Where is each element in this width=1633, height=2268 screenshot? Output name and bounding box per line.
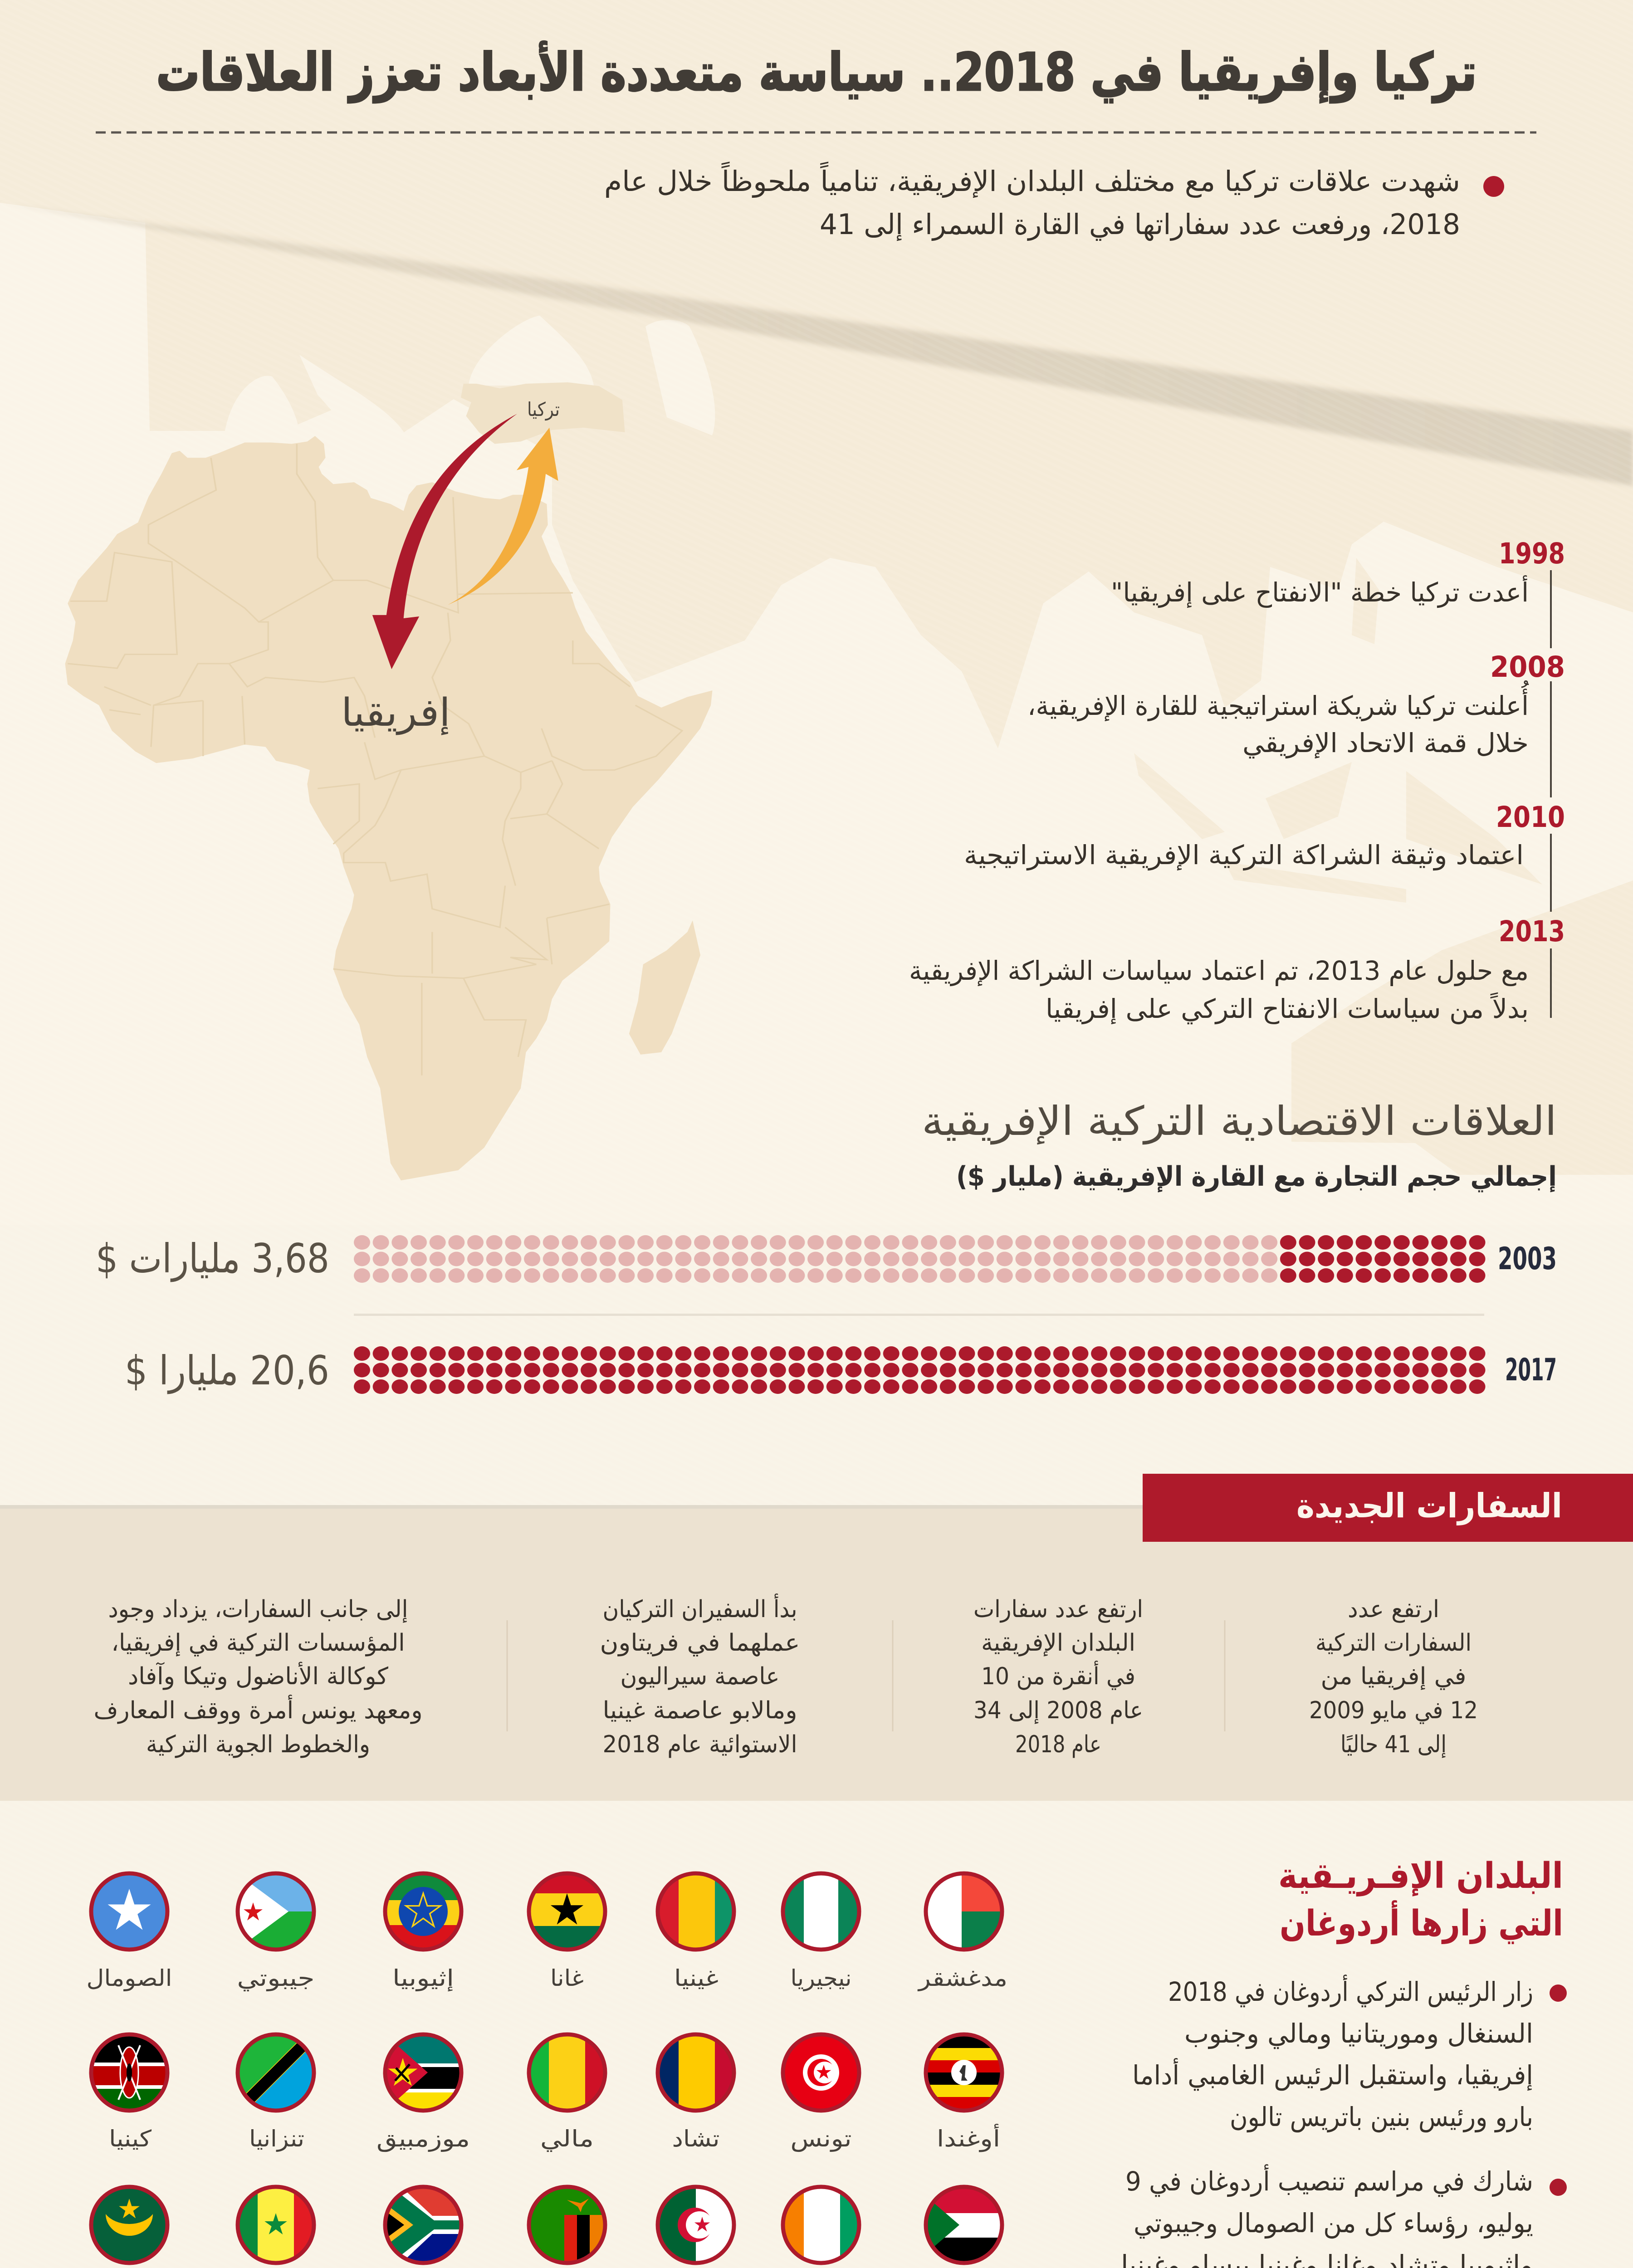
flag: Nigeria: [783, 1873, 859, 1950]
column 4: والخطوط الجوية التركية: [146, 1731, 370, 1758]
flag: Ghana: [529, 1873, 605, 1950]
intro text block: 2018، ورفعت عدد سفاراتها في القارة السمراء إلى 41: [820, 208, 1460, 241]
dots 2003: [354, 1234, 1488, 1284]
column 1: في إفريقيا من: [1321, 1663, 1466, 1690]
country labels: غينيا: [674, 1965, 719, 1991]
panel: flags grid: [91, 1873, 1002, 2263]
year 2010: 2010: [1496, 801, 1565, 834]
country labels: إثيوبيا: [392, 1965, 454, 1992]
column 2: عام 2008 إلى 34: [973, 1697, 1143, 1724]
country labels: تنزانيا: [249, 2126, 304, 2152]
country labels: كينيا: [109, 2126, 152, 2152]
dots 2017: [354, 1345, 1488, 1395]
flag: Uganda: [926, 2034, 1002, 2111]
flag: Ethiopia: [385, 1873, 461, 1950]
banner: [1143, 1474, 1633, 1542]
seas: [224, 316, 715, 435]
year 2013: 2013: [1499, 915, 1565, 948]
flag: Kenya: [91, 2034, 167, 2111]
country labels: الصومال: [86, 1965, 172, 1991]
text block: visits: إفريقيا، واستقبل الرئيس الغامبي أداما: [1132, 2058, 1533, 2091]
column 3: عاصمة سيراليون: [621, 1663, 779, 1690]
flag: Mozambique: [385, 2034, 461, 2111]
column 1: 12 في مايو 2009: [1309, 1697, 1478, 1724]
column 3: بدأ السفيران التركيان: [602, 1593, 797, 1623]
column 4: ومعهد يونس أمرة ووقف المعارف: [93, 1695, 423, 1724]
map: Africa and Turkey: [65, 382, 712, 1180]
country labels: [86, 1965, 1007, 2268]
label: Africa: إفريقيا: [341, 690, 450, 735]
flag: Mali: [529, 2034, 605, 2111]
intro text block: شهدت علاقات تركيا مع مختلف البلدان الإفريقية، تنامياً ملحوظاً خلال عام: [604, 161, 1460, 198]
heading: Erdogan's visited countries: البلدان الإفـريـقية: [1278, 1856, 1563, 1897]
heading: Erdogan's visited countries: [1278, 1856, 1563, 1944]
text block: visits: زار الرئيس التركي أردوغان في 2018: [1168, 1975, 1533, 2008]
year 2003: 2003: [1498, 1241, 1557, 1277]
event 2013: [909, 955, 1529, 1025]
country labels: تشاد: [672, 2126, 719, 2152]
intro text block: [604, 161, 1504, 241]
column 4: إلى جانب السفارات، يزداد وجود: [108, 1596, 408, 1623]
column 1: [1309, 1596, 1478, 1758]
event 2008: خلال قمة الاتحاد الإفريقي: [1242, 728, 1529, 759]
subheading: total trade: إجمالي حجم التجارة مع القارة الإفريقية (مليار $): [956, 1161, 1557, 1193]
flag: Mauritania: [91, 2187, 167, 2263]
banner: السفارات الجديدة: [1296, 1486, 1562, 1525]
column 1: السفارات التركية: [1315, 1629, 1472, 1657]
top paper background above fold: [0, 0, 1633, 431]
heading: Erdogan's visited countries: التي زارها أردوغان: [1280, 1900, 1563, 1944]
arrow: Turkey to Africa: [372, 414, 517, 669]
flag: South Africa: [385, 2187, 461, 2263]
year 2017: 2017: [1505, 1352, 1557, 1388]
dot chart 2003: [96, 1234, 1557, 1284]
text block: visits: بارو ورئيس بنين باتريس تالون: [1230, 2102, 1533, 2133]
column 2: عام 2018: [1015, 1731, 1101, 1758]
dot chart 2017: [125, 1345, 1557, 1395]
flag: Djibouti: [238, 1873, 314, 1950]
country labels: مالي: [540, 2126, 594, 2152]
column 1: ارتفع عدد: [1348, 1596, 1439, 1623]
country labels: مدغشقر: [917, 1965, 1007, 1991]
title: تركيا وإفريقيا في 2018.. سياسة متعددة الأبعاد تعزز العلاقات: [156, 41, 1477, 103]
flag: Algeria: [658, 2187, 734, 2263]
title divider: [96, 132, 1536, 133]
country labels: موزمبيق: [376, 2126, 470, 2152]
text block: inauguration: [1121, 2164, 1567, 2268]
text block: inauguration: شارك في مراسم تنصيب أردوغان في 9: [1125, 2164, 1533, 2197]
text block: inauguration: يوليو، رؤساء كل من الصومال وجيبوتي: [1134, 2208, 1533, 2239]
column 2: في أنقرة من 10: [981, 1661, 1135, 1690]
year 2008: 2008: [1490, 650, 1565, 684]
flag: Tunisia: [783, 2034, 859, 2111]
flag: Somalia: [91, 1873, 167, 1950]
Turkey shape: [461, 382, 625, 444]
flag: Chad: [658, 2034, 734, 2111]
event 2008: أُعلنت تركيا شريكة استراتيجية للقارة الإفريقية،: [1027, 680, 1529, 722]
column 3: عملهما في فريتاون: [600, 1629, 800, 1657]
value 2003: 3,68 مليارات $: [96, 1235, 329, 1282]
flag: Zambia: [529, 2187, 605, 2263]
text block: visits: السنغال وموريتانيا ومالي وجنوب: [1184, 2018, 1533, 2049]
Africa shape: [65, 436, 712, 1180]
event 1998: أعدت تركيا خطة "الانفتاح على إفريقيا": [1111, 575, 1529, 608]
panel: new embassies: [0, 1474, 1633, 1801]
column 1: إلى 41 حاليًا: [1340, 1731, 1447, 1758]
arrow: Africa to Turkey: [448, 428, 558, 605]
year 1998: 1998: [1499, 537, 1565, 570]
column 2: ارتفع عدد سفارات: [973, 1596, 1143, 1623]
country labels: جيبوتي: [237, 1965, 315, 1991]
flag: Tanzania: [238, 2034, 314, 2111]
flag: Guinea: [658, 1873, 734, 1950]
column 4: [93, 1596, 423, 1758]
column 3: [600, 1593, 800, 1758]
label: Turkey: تركيا: [527, 398, 560, 420]
flag: Madagascar: [926, 1873, 1002, 1950]
fold shadow: [0, 203, 1633, 486]
column 4: كوكالة الأناضول وتيكا وآفاد: [128, 1662, 388, 1690]
text block: visits: [1132, 1975, 1567, 2133]
flag: Ivory Coast: [783, 2187, 859, 2263]
event 2010: اعتماد وثيقة الشراكة التركية الإفريقية الاستراتيجية: [964, 840, 1524, 871]
country labels: تونس: [790, 2126, 852, 2152]
heading: economic relations: العلاقات الاقتصادية التركية الإفريقية: [922, 1098, 1557, 1145]
Madagascar shape: [629, 920, 700, 1055]
column 4: المؤسسات التركية في إفريقيا،: [112, 1629, 405, 1657]
event 2013: مع حلول عام 2013، تم اعتماد سياسات الشراكة الإفريقية: [909, 955, 1529, 987]
country labels: نيجيريا: [790, 1965, 852, 1991]
timeline line: [1550, 570, 1552, 1018]
country borders: [68, 444, 682, 1075]
country labels: أوغندا: [937, 2124, 1000, 2152]
timeline: [909, 537, 1565, 1025]
column 2: البلدان الإفريقية: [981, 1629, 1135, 1657]
flag: Senegal: [238, 2187, 314, 2263]
flag: Sudan: [926, 2187, 1002, 2263]
event 2013: بدلاً من سياسات الانفتاح التركي على إفريقيا: [1046, 992, 1529, 1025]
column 3: ومالابو عاصمة غينيا: [602, 1697, 797, 1724]
event 2008: [1027, 680, 1529, 759]
country labels: غانا: [550, 1965, 584, 1991]
column 3: الاستوائية عام 2018: [602, 1731, 797, 1758]
value 2017: 20,6 مليارا $: [125, 1347, 329, 1394]
world map silhouette: [145, 218, 1633, 1175]
chart separator: [354, 1314, 1484, 1316]
column 2: [973, 1596, 1143, 1758]
